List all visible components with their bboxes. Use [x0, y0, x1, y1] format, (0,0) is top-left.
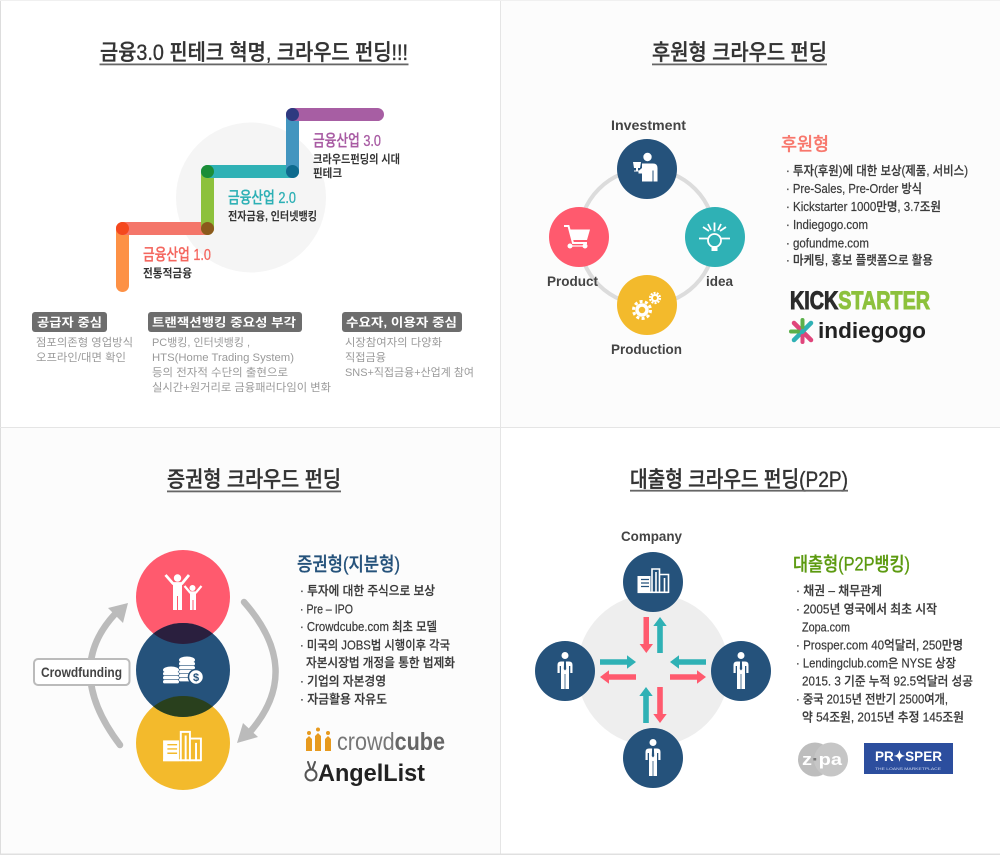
crowdfunding label: Crowdfunding — [41, 665, 122, 680]
cycle labels: Product — [547, 273, 598, 289]
list: reward type: · 마케팅, 홍보 플랫폼으로 활용 — [786, 252, 933, 268]
column: supplier centred: 오프라인/대면 확인 — [36, 351, 126, 364]
node: production — [617, 275, 677, 335]
list: P2P type: Zopa.com — [802, 620, 850, 634]
icon: coins: $ — [193, 672, 199, 684]
network background circle — [577, 594, 729, 746]
title: P2P: 대출형 크라우드 펀딩(P2P) — [630, 467, 848, 492]
logo: prosper — [864, 743, 953, 774]
label: company: Company — [621, 528, 682, 544]
column: transaction banking: HTS(Home Trading System) — [152, 352, 294, 364]
arrows: bottom pair — [639, 687, 667, 723]
column: supplier centred — [32, 312, 133, 364]
heading: P2P type: 대출형(P2P뱅킹) — [793, 554, 910, 576]
list: P2P type: · 중국 2015년 전반기 2500여개, — [796, 692, 948, 706]
list: equity type: · 자금활용 자유도 — [300, 692, 387, 706]
icon: raised-arm people — [166, 574, 202, 610]
panel: finance 3.0 fintech revolution — [0, 0, 500, 427]
step label 3.0: 크라우드펀딩의 시대 — [313, 152, 400, 166]
column: transaction banking — [148, 312, 331, 394]
logo: angellist: AngelList — [318, 760, 425, 787]
step label 2.0: 전자금융, 인터넷뱅킹 — [228, 209, 317, 223]
list: equity type: · Pre – IPO — [300, 602, 353, 616]
cycle labels — [547, 117, 733, 357]
panel: equity crowdfunding — [0, 427, 500, 855]
column: transaction banking: 등의 전자적 수단의 출현으로 — [152, 366, 288, 379]
node: company — [623, 552, 683, 612]
stepped line chart — [116, 108, 384, 292]
node: person left — [535, 641, 595, 701]
node: investment — [617, 139, 677, 199]
list: equity type: 자본시장법 개정을 통한 법제화 — [306, 656, 455, 670]
list: P2P type: · Prosper.com 40억달러, 250만명 — [796, 638, 963, 652]
node: product — [549, 207, 609, 267]
logo: crowdcube: crowdcube — [337, 728, 445, 756]
panel: P2P lending crowdfunding — [500, 427, 1000, 855]
step label 1.0: 전통적금융 — [143, 267, 192, 280]
heading: reward type: 후원형 — [781, 134, 829, 154]
list: reward type: · Pre-Sales, Pre-Order 방식 — [786, 182, 922, 196]
list: P2P type — [796, 584, 973, 724]
list: equity type: · 투자에 대한 주식으로 보상 — [300, 584, 435, 598]
list: reward type: · Indiegogo.com — [786, 218, 868, 232]
step label 2.0: 금융산업 2.0 — [228, 189, 296, 207]
logo: prosper: THE LOANS MARKETPLACE — [875, 767, 942, 771]
cycle labels: Production — [611, 341, 682, 357]
arrows: left pair — [600, 655, 636, 684]
crowdfunding label — [34, 659, 130, 685]
node: person bottom — [623, 728, 683, 788]
logo: indiegogo: indiegogo — [818, 318, 926, 343]
column: consumer centred — [342, 312, 474, 379]
title: reward: 후원형 크라우드 펀딩 — [652, 40, 827, 65]
logo: prosper: PR✦SPER — [875, 748, 942, 764]
column: consumer centred: SNS+직접금융+산업계 참여 — [345, 366, 474, 379]
step label 3.0 — [313, 132, 400, 180]
column: transaction banking: PC뱅킹, 인터넷뱅킹 , — [152, 336, 250, 349]
title: finance 3.0: 금융3.0 핀테크 혁명, 크라우드 펀딩!!! — [100, 40, 408, 65]
list: P2P type: 2015. 3 기준 누적 92.5억달러 성공 — [802, 674, 973, 688]
background circle — [176, 122, 326, 272]
arrow: right arc down — [237, 602, 276, 743]
column: supplier centred: 점포의존형 영업방식 — [36, 336, 133, 349]
step label 3.0: 핀테크 — [313, 166, 342, 180]
heading: equity type: 증권형(지분형) — [297, 554, 400, 576]
step label 2.0 — [228, 189, 317, 223]
column: consumer centred: 수요자, 이용자 중심 — [346, 316, 457, 330]
column: supplier centred: 공급자 중심 — [37, 316, 102, 330]
icon: coins — [163, 656, 204, 684]
column: consumer centred: 직접금융 — [345, 351, 386, 364]
column: consumer centred: 시장참여자의 다양화 — [345, 336, 442, 349]
list: P2P type: · 채권 – 채무관계 — [796, 584, 882, 598]
cycle labels: idea — [706, 273, 733, 289]
panel: reward crowdfunding — [500, 0, 1000, 427]
arrows: right pair — [670, 655, 706, 684]
icon: buildings — [163, 732, 201, 761]
list: reward type: · Kickstarter 1000만명, 3.7조원 — [786, 200, 941, 214]
node: idea — [685, 207, 745, 267]
list: P2P type: · Lendingclub.com은 NYSE 상장 — [796, 656, 956, 670]
list: reward type: · gofundme.com — [786, 236, 869, 250]
logo: zopa — [798, 742, 848, 776]
logo: kickstarter: KICKSTARTER — [790, 287, 930, 315]
list: reward type: · 투자(후원)에 대한 보상(제품, 서비스) — [786, 164, 968, 178]
logo: zopa: z·pa — [802, 750, 843, 769]
step label 1.0: 금융산업 1.0 — [143, 246, 211, 264]
title: equity: 증권형 크라우드 펀딩 — [167, 467, 341, 492]
list: P2P type: 약 54조원, 2015년 추정 145조원 — [802, 710, 964, 724]
column: transaction banking: 트랜잭션뱅킹 중요성 부각 — [152, 316, 296, 330]
column: transaction banking: 실시간+원거리로 금융패러다임이 변화 — [152, 381, 331, 394]
list: equity type — [300, 584, 455, 706]
venn circles — [136, 550, 230, 790]
list: P2P type: · 2005년 영국에서 최초 시작 — [796, 602, 937, 616]
list: equity type: · 미국의 JOBS법 시행이후 각국 — [300, 638, 450, 652]
cycle labels: Investment — [611, 117, 686, 133]
arrows: top pair — [640, 617, 667, 653]
list: reward type — [786, 164, 968, 268]
cycle ring — [579, 169, 715, 305]
node: person right — [711, 641, 771, 701]
list: equity type: · 기업의 자본경영 — [300, 674, 386, 688]
arrow: left arc up — [90, 603, 128, 745]
list: equity type: · Crowdcube.com 최초 모델 — [300, 620, 437, 634]
step label 3.0: 금융산업 3.0 — [313, 132, 381, 150]
step label 1.0 — [143, 246, 211, 280]
